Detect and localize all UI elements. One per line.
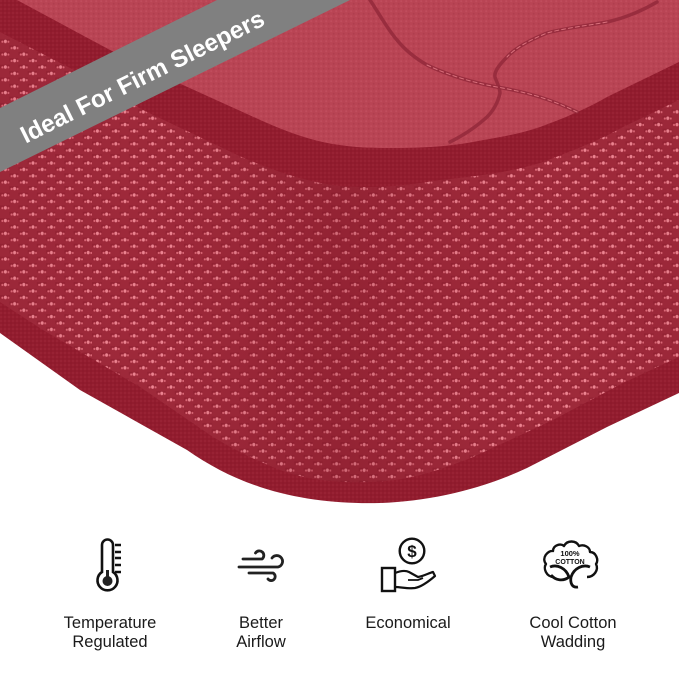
diagonal banner [0,0,350,172]
quilted top fabric [17,0,679,148]
feature: cool cotton wadding [529,542,617,651]
icon: thermometer [98,540,121,590]
label: better airflow: Airflow [236,633,286,651]
icon: wind [239,551,283,581]
mesh side panel [0,32,679,482]
label: cool cotton wadding: Cool Cotton [529,614,617,632]
label: better airflow: Better [239,614,284,632]
quilt stitching [370,0,657,142]
mattress binding edge [0,0,679,503]
label: economical: Economical [365,614,451,632]
icon: cotton boll: COTTON [555,559,585,566]
feature: better airflow [236,551,286,651]
banner strip [0,0,350,172]
banner text: Ideal For Firm Sleepers [16,5,269,149]
label: temperature regulated: Regulated [72,633,148,651]
feature: economical [365,539,451,632]
label: cool cotton wadding: Wadding [541,633,605,651]
icon: coin over hand: $ [407,542,417,561]
feature: temperature regulated [64,540,156,651]
icon: cotton boll [544,542,597,587]
label: temperature regulated: Temperature [64,614,156,632]
icon: cotton boll: 100% [560,549,580,558]
mattress corner photo [0,0,679,503]
